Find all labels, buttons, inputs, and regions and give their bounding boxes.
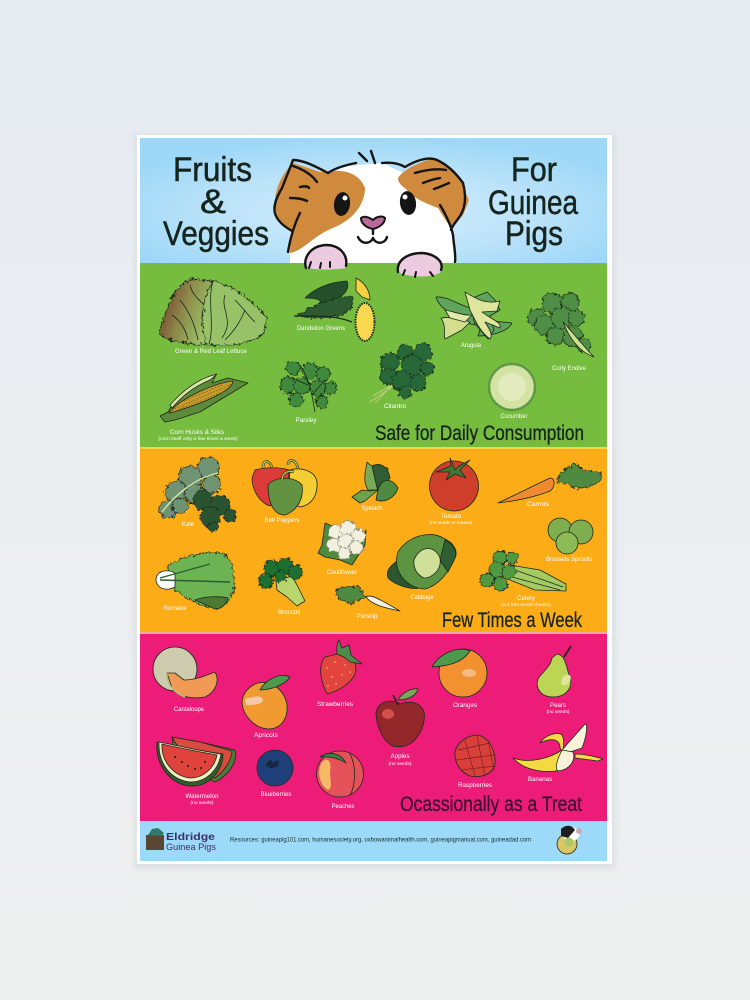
label: Apples: Apples xyxy=(390,753,410,760)
label: Cauliflower: Cauliflower xyxy=(327,569,357,576)
poster shadow xyxy=(134,134,616,870)
label: Cucumber: Cucumber xyxy=(500,413,528,420)
title right: For Guinea Pigs xyxy=(488,151,578,253)
panel: safe for daily consumption xyxy=(140,245,607,449)
label: Pears: Pears xyxy=(550,702,566,709)
poster white border xyxy=(137,135,612,864)
label: Green & Red Leaf Lettuce: Green & Red Leaf Lettuce xyxy=(175,348,247,355)
label: Cabbage: Cabbage xyxy=(410,594,434,601)
title left: Fruits & Veggies: Veggies xyxy=(163,215,269,253)
label: Pears: (no seeds) xyxy=(546,709,570,714)
panel: header xyxy=(140,138,607,263)
icon: orange xyxy=(432,649,487,697)
icon: cucumber xyxy=(489,364,535,410)
icon: bell peppers xyxy=(252,460,317,515)
label: Bananas: Bananas xyxy=(528,776,552,783)
icon: spinach xyxy=(352,462,398,503)
label: Watermelon: (no seeds) xyxy=(190,800,214,805)
label: Apples xyxy=(388,753,412,766)
label: Pears xyxy=(546,702,570,714)
label: Parsnip: Parsnip xyxy=(356,613,378,620)
label: Celery xyxy=(501,595,552,607)
label: Apricots: Apricots xyxy=(254,732,278,739)
label: Bell Peppers: Bell Peppers xyxy=(264,517,300,524)
label: Tomato: (no seeds or leaves) xyxy=(430,520,473,525)
panel: occasionally as a treat xyxy=(140,634,607,821)
title right: For Guinea Pigs: Guinea xyxy=(488,184,578,222)
label: Strawberries: Strawberries xyxy=(317,701,353,708)
icon: guinea pig mascot xyxy=(557,826,582,854)
icon: lettuce xyxy=(159,279,267,345)
label: Spinach: Spinach xyxy=(362,505,383,512)
resources text: Resources: guineapig101.com, humanesociety.org, oxbowanimalhealth.com, guineapigmanual.com, guineadad.com xyxy=(230,836,531,844)
title left: Fruits & Veggies: Fruits xyxy=(173,151,252,189)
title left: Fruits & Veggies: & xyxy=(200,183,226,221)
label: Blueberries: Blueberries xyxy=(260,791,292,798)
label: Tomato xyxy=(430,513,473,525)
icon: dandelion greens xyxy=(294,278,374,341)
icon: apricot xyxy=(242,675,290,729)
label: Romaine: Romaine xyxy=(164,605,187,612)
guinea pig paws xyxy=(305,245,442,277)
icon: pear xyxy=(537,646,573,697)
label: Brussels Sprouts: Brussels Sprouts xyxy=(546,556,592,563)
label: Oranges: Oranges xyxy=(453,702,477,709)
icon: strawberry xyxy=(321,640,362,694)
icon: celery xyxy=(480,551,566,591)
label: Corn Husks & Silks: Corn Husks & Silks xyxy=(170,429,224,436)
icon: peach xyxy=(316,751,364,797)
label: Tomato: Tomato xyxy=(441,513,461,520)
icon: cantaloupe xyxy=(153,647,217,698)
icon: cauliflower xyxy=(318,521,366,565)
icon: banana xyxy=(513,724,603,771)
label: Raspberries: Raspberries xyxy=(458,782,492,789)
label: Kale: Kale xyxy=(182,521,194,528)
heading: Ocassionally as a Treat: Ocassionally as a Treat xyxy=(400,793,582,816)
title right: For Guinea Pigs: Pigs xyxy=(505,215,563,253)
icon: curly endive xyxy=(528,293,594,357)
label: Cantaloupe: Cantaloupe xyxy=(174,706,204,713)
logo: Eldridge Guinea Pigs: Guinea Pigs xyxy=(166,842,216,853)
label: Watermelon: Watermelon xyxy=(186,793,219,800)
icon: arugula xyxy=(436,292,512,339)
label: Carrots: Carrots xyxy=(527,501,549,508)
icon: cilantro xyxy=(370,343,434,403)
title left: Fruits & Veggies xyxy=(163,151,269,253)
icon: cabbage xyxy=(387,534,456,589)
label: Celery: Celery xyxy=(517,595,536,602)
title right: For Guinea Pigs: For xyxy=(511,151,557,189)
icon: carrot xyxy=(498,463,602,503)
label: Watermelon xyxy=(186,793,219,805)
label: Arugula: Arugula xyxy=(461,342,481,349)
icon: brussels sprouts xyxy=(548,518,593,554)
heading: Safe for Daily Consumption: Safe for Daily Consumption xyxy=(375,422,584,445)
icon: parsnip xyxy=(335,586,400,611)
icon: romaine xyxy=(156,552,234,609)
label: Corn Husks & Silks: (corn itself only a few times a week) xyxy=(158,436,238,441)
icon: watermelon xyxy=(157,737,236,786)
label: Apples: (no seeds) xyxy=(388,761,412,766)
label: Dandelion Greens: Dandelion Greens xyxy=(297,325,345,332)
logo: Eldridge Guinea Pigs: Eldridge xyxy=(166,831,215,843)
icon: raspberry xyxy=(455,735,495,777)
label: Cilantro: Cilantro xyxy=(384,403,406,410)
icon: parsley xyxy=(280,361,337,412)
label: Parsley: Parsley xyxy=(296,417,317,424)
heading: Few Times a Week: Few Times a Week xyxy=(442,609,582,632)
icon: guinea pig xyxy=(274,151,469,263)
icon: corn xyxy=(160,374,248,422)
label: Celery: (cut into small chunks) xyxy=(501,602,552,607)
panel: few times a week xyxy=(140,449,607,634)
label: Peaches: Peaches xyxy=(332,803,354,810)
icon: blueberry xyxy=(257,750,293,786)
icon: apple xyxy=(376,689,424,747)
icon: kale xyxy=(159,457,236,532)
logo: Eldridge Guinea Pigs xyxy=(146,828,216,853)
label: Broccoli: Broccoli xyxy=(278,609,300,616)
icon: broccoli xyxy=(259,558,305,606)
panel: footer xyxy=(140,821,607,861)
icon: tomato xyxy=(430,458,478,511)
label: Curly Endive: Curly Endive xyxy=(552,365,586,372)
label: Corn Husks & Silks xyxy=(158,429,238,441)
